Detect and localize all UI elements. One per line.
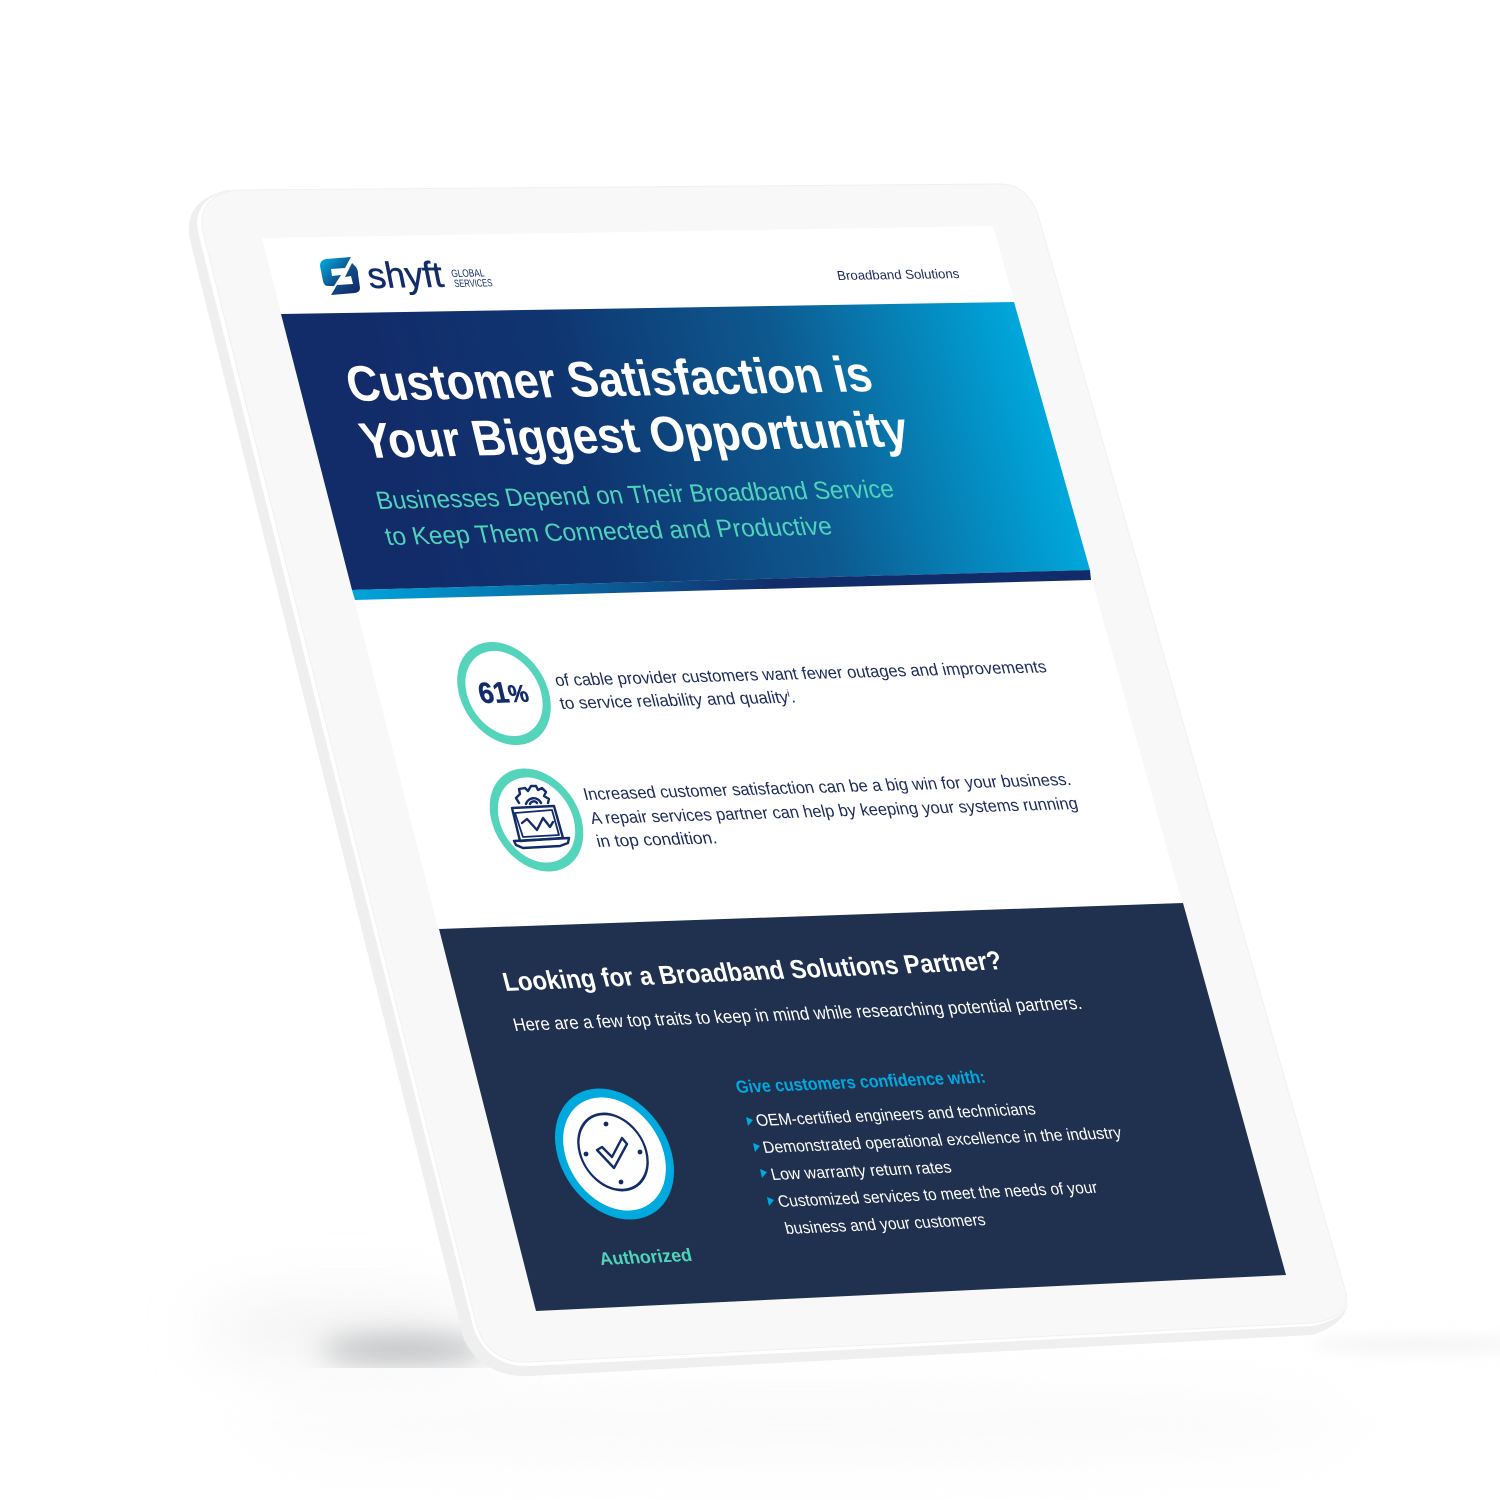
satisfaction text bbox=[581, 769, 1080, 851]
badge label: Authorized bbox=[597, 1244, 694, 1269]
satisfaction text: A repair services partner can help by keeping your systems running bbox=[588, 793, 1080, 828]
tablet front face bbox=[202, 184, 1346, 1362]
logo icon bbox=[320, 257, 360, 295]
tablet mockup infographic bbox=[189, 184, 1450, 1376]
tablet highlight bbox=[197, 184, 1348, 1366]
logo tagline: SERVICES bbox=[453, 277, 494, 290]
list items: OEM-certified engineers and technicians bbox=[754, 1100, 1038, 1130]
panel heading: Looking for a Broadband Solutions Partner? bbox=[499, 945, 1005, 997]
icon: laptop with gear bbox=[512, 786, 569, 848]
stat text: i bbox=[786, 689, 791, 700]
list items bbox=[754, 1100, 1124, 1238]
stat ring bbox=[451, 645, 557, 742]
panel intro: Here are a few top traits to keep in mind while researching potential partners. bbox=[511, 992, 1084, 1035]
stat text: . bbox=[788, 687, 798, 706]
hero banner bbox=[281, 302, 1091, 600]
subtitle: to Keep Them Connected and Productive bbox=[382, 513, 835, 551]
stat value: 61% bbox=[475, 676, 532, 710]
title: Customer Satisfaction is bbox=[340, 346, 878, 412]
title: Your Biggest Opportunity bbox=[354, 401, 914, 469]
header label: Broadband Solutions bbox=[836, 266, 961, 283]
banner bottom strip bbox=[352, 570, 1091, 600]
list heading: Give customers confidence with: bbox=[734, 1067, 987, 1097]
screen page bbox=[262, 226, 1286, 1311]
list bullets bbox=[746, 1117, 774, 1206]
stat text: of cable provider customers want fewer outages and improvements bbox=[552, 657, 1049, 690]
logo tagline bbox=[450, 267, 494, 290]
panel background bbox=[439, 903, 1286, 1311]
subtitle: Businesses Depend on Their Broadband Service bbox=[373, 475, 897, 515]
list items: Demonstrated operational excellence in the industry bbox=[761, 1123, 1124, 1157]
stat: 61 percent bbox=[451, 645, 1049, 742]
ground shadow bbox=[276, 1306, 1450, 1368]
satisfaction item bbox=[483, 769, 1080, 868]
icon: clock check bbox=[570, 1113, 656, 1191]
badge disc bbox=[546, 1091, 683, 1217]
list items: Low warranty return rates bbox=[769, 1158, 954, 1184]
page header bbox=[320, 254, 961, 296]
logo tagline: GLOBAL bbox=[450, 267, 486, 280]
logo wordmark: shyft bbox=[363, 254, 447, 296]
title bbox=[340, 346, 914, 469]
dark partner panel bbox=[439, 903, 1286, 1311]
banner background bbox=[281, 302, 1090, 590]
list items: business and your customers bbox=[783, 1210, 988, 1238]
authorized badge bbox=[546, 1091, 694, 1269]
stat text: to service reliability and quality bbox=[557, 687, 793, 713]
stat text bbox=[552, 657, 1049, 713]
subtitle bbox=[373, 475, 897, 551]
tablet body bbox=[189, 184, 1348, 1376]
list items: Customized services to meet the needs of your bbox=[776, 1178, 1100, 1211]
satisfaction text: in top condition. bbox=[594, 828, 719, 851]
laptop ring bbox=[483, 772, 590, 868]
traits list bbox=[734, 1067, 1124, 1238]
tablet side edge bbox=[189, 184, 1348, 1376]
satisfaction text: Increased customer satisfaction can be a big win for your business. bbox=[581, 769, 1073, 804]
